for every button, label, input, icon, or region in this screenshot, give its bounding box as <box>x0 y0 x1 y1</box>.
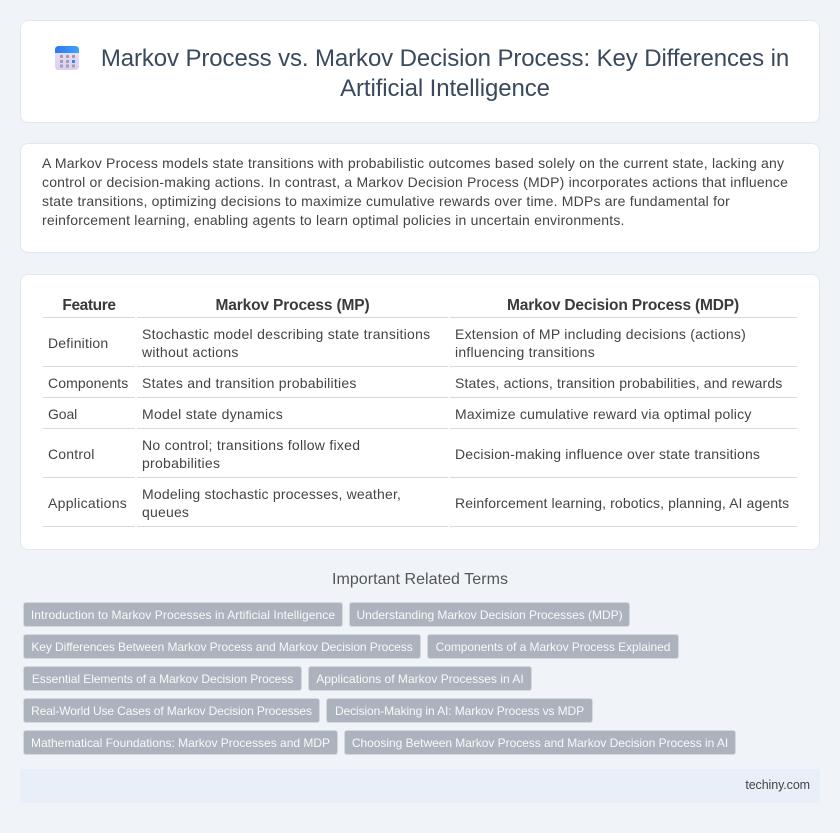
title: Markov Process vs. Markov Decision Process: Key Differences in <box>101 45 789 72</box>
row: goal MDP: Maximize cumulative reward via optimal policy <box>455 406 752 422</box>
tag: Components of a Markov Process Explained <box>436 640 670 654</box>
row: definition MDP <box>455 326 746 360</box>
tag: Choosing Between Markov Process and Markov Decision Process in AI <box>352 736 728 750</box>
row: definition MDP: Extension of MP including decisions (actions) <box>455 326 746 342</box>
row: control: Control <box>48 446 95 462</box>
tag: Key Differences Between Markov Process and Markov Decision Process <box>31 640 413 654</box>
row: definition MP: Stochastic model describing state transitions <box>142 326 430 342</box>
row: applications MP: Modeling stochastic processes, weather, <box>142 486 401 502</box>
tag <box>23 602 343 627</box>
tag <box>23 698 320 723</box>
tag <box>23 634 421 659</box>
row: components MDP: States, actions, transition probabilities, and rewards <box>455 375 782 391</box>
panel: header <box>20 20 820 123</box>
tag: Real-World Use Cases of Markov Decision Processes <box>31 704 312 718</box>
row: control MDP: Decision-making influence over state transitions <box>455 446 760 462</box>
table header: MP: Markov Process (MP) <box>216 297 369 314</box>
row: definition MP: without actions <box>142 344 239 360</box>
row: control MP: probabilities <box>142 455 220 471</box>
row: applications MDP: Reinforcement learning, robotics, planning, AI agents <box>455 495 789 511</box>
tag <box>427 634 679 659</box>
title <box>101 45 789 102</box>
row: control MP <box>142 437 360 471</box>
row: definition MP <box>142 326 430 360</box>
tag <box>326 698 593 723</box>
intro paragraph: state transitions, optimizing decisions to maximize cumulative rewards over time. MDPs are fundamental for <box>42 193 730 209</box>
row: applications: Applications <box>48 495 127 511</box>
tag <box>23 730 338 755</box>
heading: related terms: Important Related Terms <box>332 571 508 588</box>
footer <box>20 769 820 803</box>
tag: Understanding Markov Decision Processes (MDP) <box>356 608 623 622</box>
row: applications MP: queues <box>142 504 189 520</box>
icon: calendar <box>55 46 79 70</box>
table header: MDP: Markov Decision Process (MDP) <box>507 297 739 314</box>
table header: feature: Feature <box>62 297 116 314</box>
tag: Introduction to Markov Processes in Artificial Intelligence <box>31 608 335 622</box>
row: definition: Definition <box>48 335 108 351</box>
tag group: related terms <box>23 602 736 755</box>
panel: comparison table <box>20 274 820 550</box>
row: control MP: No control; transitions follow fixed <box>142 437 360 453</box>
title: Artificial Intelligence <box>340 75 550 102</box>
tag: Decision-Making in AI: Markov Process vs MDP <box>335 704 584 718</box>
row: components: Components <box>48 375 128 391</box>
panel: intro text <box>20 143 820 253</box>
intro paragraph: control or decision-making actions. In contrast, a Markov Decision Process (MDP) incorporates actions that influence <box>42 174 788 190</box>
intro paragraph: reinforcement learning, enabling agents to learn optimal policies in uncertain environments. <box>42 212 625 228</box>
row: goal MP: Model state dynamics <box>142 406 283 422</box>
row: applications MP <box>142 486 401 520</box>
tag <box>349 602 630 627</box>
tag <box>23 666 302 691</box>
intro paragraph: A Markov Process models state transitions with probabilistic outcomes based solely on the current state, lacking any <box>42 155 784 171</box>
tag: Applications of Markov Processes in AI <box>316 672 524 686</box>
intro paragraph <box>42 155 788 228</box>
tag <box>344 730 736 755</box>
row: goal: Goal <box>48 406 77 422</box>
tag: Mathematical Foundations: Markov Processes and MDP <box>31 736 330 750</box>
row: components MP: States and transition probabilities <box>142 375 357 391</box>
tag: Essential Elements of a Markov Decision Process <box>32 672 293 686</box>
tag <box>308 666 532 691</box>
row: definition MDP: influencing transitions <box>455 344 595 360</box>
footer: site name: techiny.com <box>745 778 810 792</box>
